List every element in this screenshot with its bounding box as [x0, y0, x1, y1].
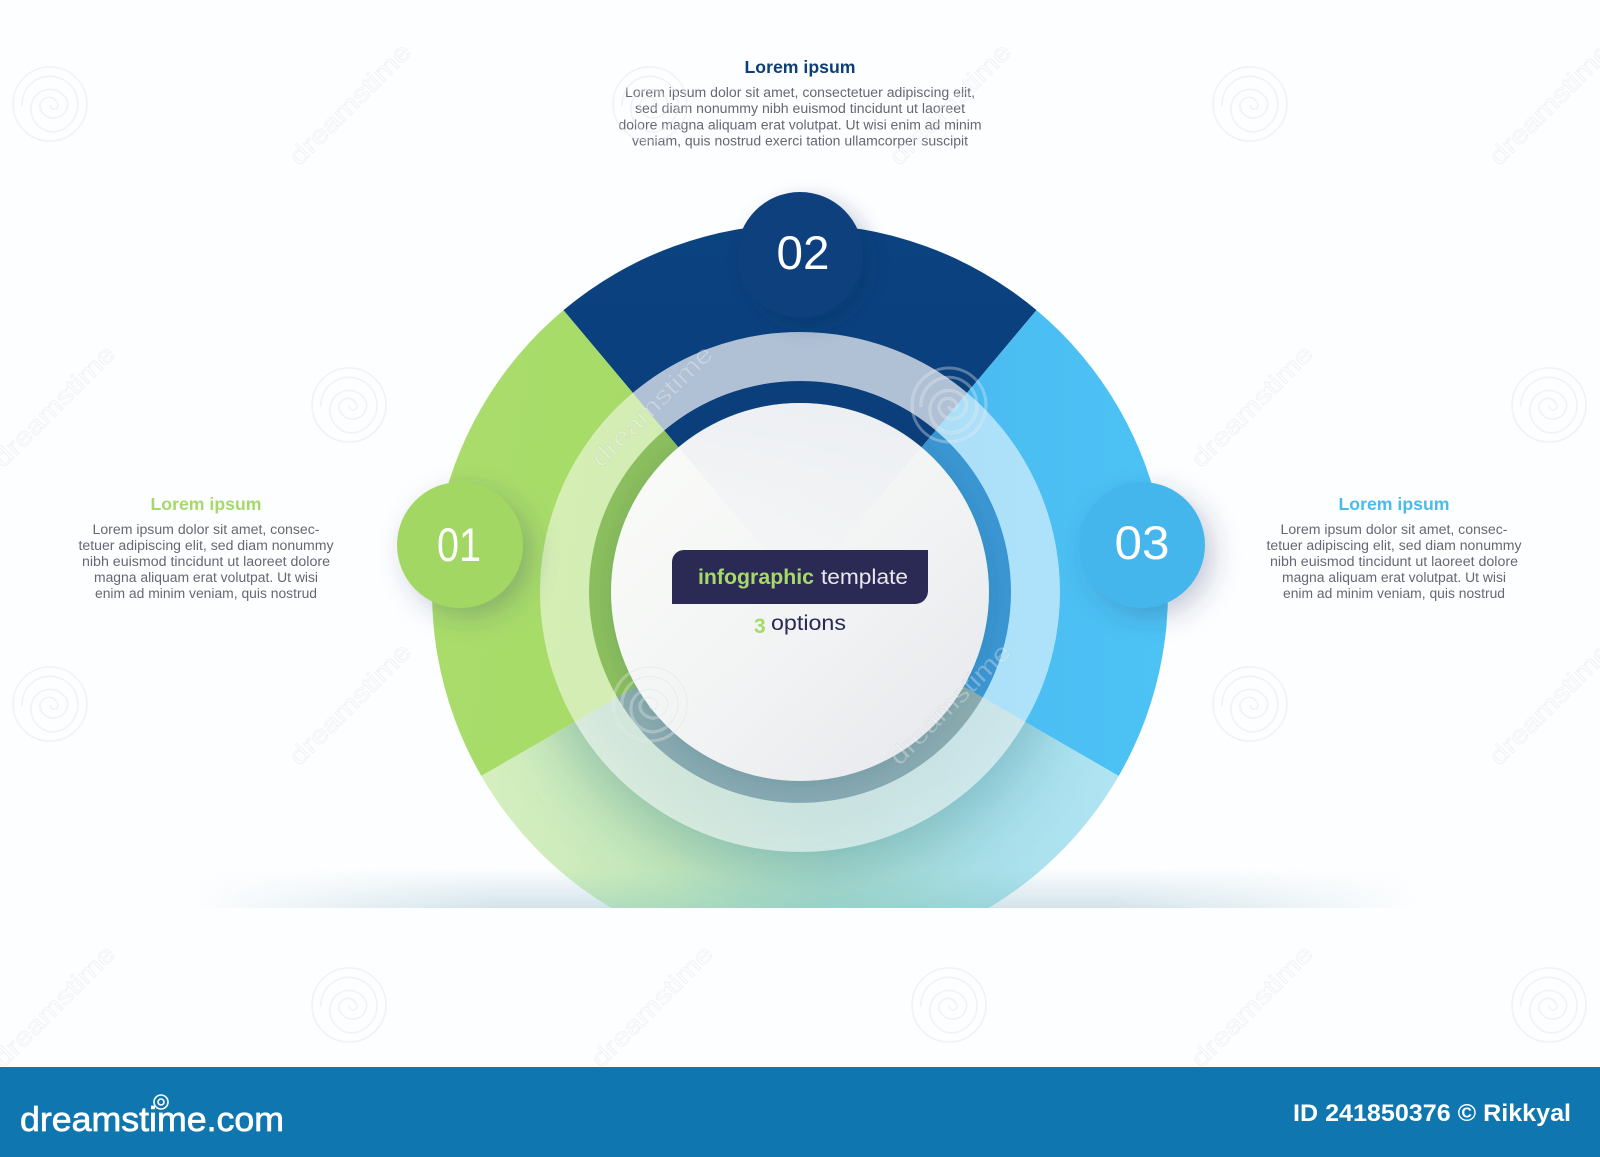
circular diagram — [432, 224, 1168, 960]
badge 03 — [1079, 482, 1205, 608]
text block: option 02 — [618, 57, 982, 148]
footer bar — [0, 1067, 1600, 1157]
text block: option 03: Lorem ipsum — [1338, 494, 1450, 514]
segment: faded bottom — [482, 686, 1119, 908]
footer logo spiral — [154, 1095, 168, 1109]
text block: option 02: Lorem ipsum — [744, 57, 856, 77]
text block: option 03: tetuer adipiscing elit, sed diam nonummy — [1266, 538, 1522, 553]
centre banner — [672, 550, 928, 604]
badge 02 — [737, 192, 863, 318]
centre disc — [611, 403, 989, 781]
watermark text: dreamstime — [1186, 340, 1319, 473]
inner ring: blue arc — [922, 430, 1011, 698]
text block: option 03: Lorem ipsum dolor sit amet, consec- — [1280, 522, 1508, 537]
text block: option 01: nibh euismod tincidunt ut laoreet dolore — [82, 554, 330, 569]
text block: option 01 — [78, 494, 334, 601]
inner ring: grey arc — [618, 686, 982, 803]
watermark text: dreamstime — [884, 638, 1017, 771]
text block: option 01: Lorem ipsum dolor sit amet, consec- — [92, 522, 320, 537]
watermark text: dreamstime — [1484, 38, 1600, 171]
text block: option 03: nibh euismod tincidunt ut laoreet dolore — [1270, 554, 1518, 569]
banner text: infographic — [698, 565, 814, 589]
text block: option 01: Lorem ipsum — [150, 494, 262, 514]
text block: option 02: Lorem ipsum dolor sit amet, consectetuer adipiscing elit, — [625, 85, 975, 100]
text block: option 03: magna aliquam erat volutpat. Ut wisi — [1282, 570, 1506, 585]
inner ring: green arc — [589, 430, 678, 698]
text block: option 01: magna aliquam erat volutpat. Ut wisi — [94, 570, 318, 585]
watermark text: dreamstime — [1186, 940, 1319, 1073]
watermark text: dreamstime — [586, 340, 719, 473]
banner text: template — [821, 565, 908, 589]
text block: option 01: tetuer adipiscing elit, sed diam nonummy — [78, 538, 334, 553]
text block: option 02: dolore magna aliquam erat volutpat. Ut wisi enim ad minim — [618, 118, 982, 132]
text block: option 03 — [1266, 494, 1522, 601]
inner ring: navy arc — [664, 430, 936, 447]
footer logo text: dreamstime.com — [20, 1101, 284, 1139]
watermark text: dreamstime — [884, 38, 1017, 171]
text block: option 01: enim ad minim veniam, quis nostrud — [95, 586, 317, 601]
text block: option 03: enim ad minim veniam, quis nostrud — [1283, 586, 1505, 601]
footer image id: ID 241850376 © Rikkyal — [1293, 1100, 1571, 1127]
centre caption: options — [771, 612, 846, 635]
watermark text: dreamstime — [586, 940, 719, 1073]
floor shadow — [245, 875, 1364, 908]
text block: option 02: veniam, quis nostrud exerci tation ullamcorper suscipit — [632, 134, 968, 148]
number 02: 02 — [776, 226, 830, 279]
translucent ring — [565, 356, 1035, 827]
segment: navy option 02 — [564, 228, 1036, 447]
watermark text: dreamstime — [1484, 638, 1600, 771]
watermark text: dreamstime — [284, 38, 417, 171]
segment: green option 01 — [432, 310, 678, 776]
number 03: 03 — [1114, 516, 1170, 569]
text block: option 02: sed diam nonummy nibh euismod tincidunt ut laoreet — [635, 101, 965, 116]
centre caption: 3 — [754, 615, 766, 638]
segment: blue option 03 — [922, 310, 1168, 776]
number 01: 01 — [437, 518, 481, 571]
watermark text: dreamstime — [284, 638, 417, 771]
badge 01 — [397, 482, 523, 608]
